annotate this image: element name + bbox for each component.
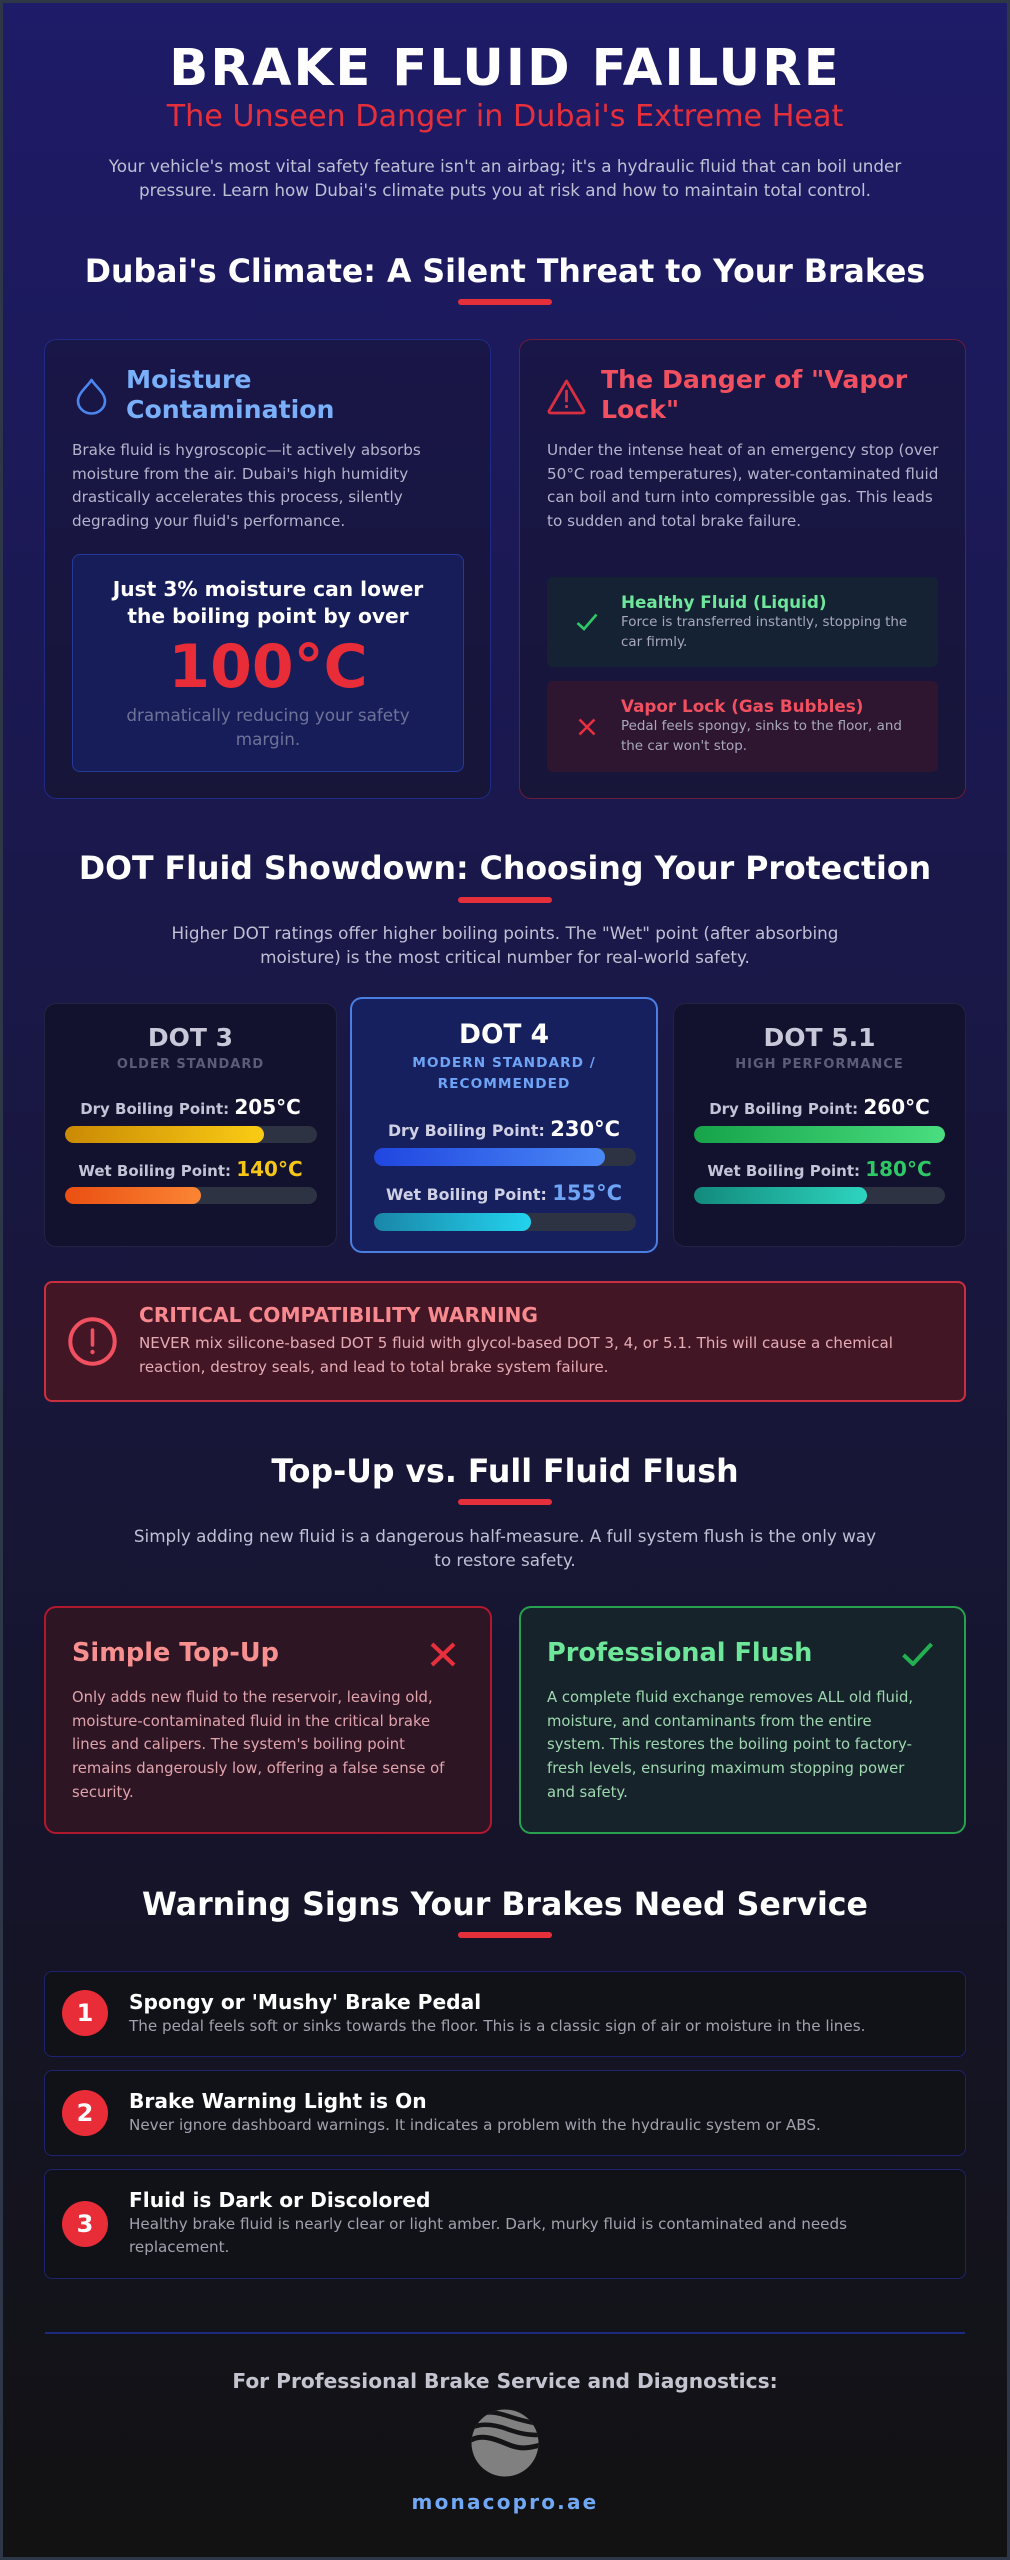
sign title: Spongy or 'Mushy' Brake Pedal [129,1990,481,2014]
sign description: Healthy brake fluid is nearly clear or light amber. Dark, murky fluid is contaminated and needs [129,2215,847,2233]
icon: alert circle [68,1317,117,1366]
icon: check [902,1642,933,1666]
stat lead-in: Just 3% moisture can lower [113,577,423,601]
number badge [62,2090,108,2136]
panel: simple top-up [44,1606,492,1834]
stat lead-in [112,577,424,628]
warning sign 3 [44,2169,966,2279]
vapor description: Pedal feels spongy, sinks to the floor, and [621,719,902,734]
flush intro text: Simply adding new fluid is a dangerous half-measure. A full system flush is the only way [134,1526,876,1546]
callout: compatibility warning [44,1281,966,1402]
DOT intro text: Higher DOT ratings offer higher boiling points. The "Wet" point (after absorbing [172,923,838,943]
flush intro text: to restore safety. [434,1550,576,1570]
top-up text: Only adds new fluid to the reservoir, leaving old, [72,1689,433,1706]
panel body text: degrading your fluid's performance. [72,512,345,530]
icon: cross [578,718,596,736]
top-up text: moisture-contaminated fluid in the critical brake [72,1713,430,1730]
sign description: Never ignore dashboard warnings. It indicates a problem with the hydraulic system or ABS. [129,2116,821,2134]
number badge [62,1990,108,2036]
wet bar [374,1213,636,1231]
top-up heading: Simple Top-Up [72,1638,279,1668]
intro text: pressure. Learn how Dubai's climate puts you at risk and how to maintain total control. [139,180,871,200]
sign title: Brake Warning Light is On [129,2089,427,2113]
number badge: 1 [77,1999,93,2027]
warning sign 2 [44,2070,966,2156]
stat caption: dramatically reducing your safety [126,705,410,725]
top-up text: remains dangerously low, offering a false sense of [72,1760,444,1777]
footer website: monacopro.ae [412,2490,598,2514]
dry bar [694,1126,945,1143]
DOT intro text [172,923,838,967]
panel: DOT 4 [350,997,658,1253]
dry bar [65,1126,317,1143]
panel body text: drastically accelerates this process, silently [72,488,403,506]
DOT 3 tag: OLDER STANDARD [117,1057,264,1072]
DOT 4 tag: RECOMMENDED [438,1076,570,1092]
warning heading: CRITICAL COMPATIBILITY WARNING [139,1303,538,1327]
panel body text: 50°C road temperatures), water-contaminated fluid [547,465,938,483]
warning sign 1 [44,1971,966,2057]
dry label: Dry Boiling Point: 230°C [388,1117,620,1141]
DOT 4 tag: MODERN STANDARD / [412,1055,596,1071]
icon: water drop [76,378,106,415]
panel: vapor lock [519,339,966,799]
footer call to action: For Professional Brake Service and Diagnostics: [232,2369,778,2393]
panel: DOT 5.1 [673,1003,966,1247]
flush text: moisture, and contaminants from the entire [547,1713,872,1730]
top-up text: security. [72,1784,134,1801]
panel: DOT 3 [44,1003,337,1247]
wet bar [694,1187,945,1204]
heading: flush section: Top-Up vs. Full Fluid Flush [271,1454,739,1490]
panel: moisture contamination [44,339,491,799]
DOT 5.1 tag: HIGH PERFORMANCE [735,1057,904,1072]
flush intro text [134,1526,876,1570]
icon: cross [430,1642,456,1666]
vapor title: Vapor Lock (Gas Bubbles) [621,696,863,716]
stat lead-in: the boiling point by over [127,604,409,628]
heading: warning signs: Warning Signs Your Brakes Need Service [142,1887,868,1923]
DOT 3 name: DOT 3 [148,1023,233,1052]
dry label: Dry Boiling Point: 205°C [80,1095,301,1119]
panel: professional flush [519,1606,966,1834]
DOT 4 tag [412,1055,596,1092]
stat number: 100°C [168,632,368,702]
panel body text [547,441,938,530]
DOT 4 name: DOT 4 [459,1019,549,1050]
vapor description [621,719,902,754]
flush text [547,1689,913,1801]
panel heading: Lock" [601,395,679,424]
panel heading [126,365,334,424]
sign title: Fluid is Dark or Discolored [129,2188,431,2212]
panel body text: moisture from the air. Dubai's high humidity [72,465,408,483]
healthy fluid row [547,577,938,667]
number badge: 2 [77,2099,93,2127]
healthy description [621,615,907,650]
wet bar [65,1187,317,1204]
flush text: A complete fluid exchange removes ALL old fluid, [547,1689,913,1706]
healthy description: Force is transferred instantly, stopping the [621,615,907,630]
panel heading [601,365,908,424]
panel heading: The Danger of "Vapor [601,365,907,394]
warning text [139,1334,893,1376]
flush heading: Professional Flush [547,1638,812,1668]
panel body text [72,441,421,530]
panel body text: can boil and turn into compressible gas. This leads [547,488,933,506]
wet label: Wet Boiling Point: 155°C [386,1181,622,1205]
stat caption: margin. [236,729,300,749]
heading: climate section: Dubai's Climate: A Silent Threat to Your Brakes [85,254,925,290]
warning text: reaction, destroy seals, and lead to total brake system failure. [139,1358,608,1376]
DOT 5.1 name: DOT 5.1 [763,1023,876,1052]
sign description: replacement. [129,2238,229,2256]
sign description: The pedal feels soft or sinks towards the floor. This is a classic sign of air or moisture in the lines. [129,2017,865,2035]
number badge [62,2201,108,2247]
panel body text: Brake fluid is hygroscopic—it actively absorbs [72,441,421,459]
wet label: Wet Boiling Point: 180°C [707,1157,932,1181]
top-up text: lines and calipers. The system's boiling point [72,1736,405,1753]
stat caption [126,705,410,749]
wet label: Wet Boiling Point: 140°C [78,1157,303,1181]
vapor description: the car won't stop. [621,739,747,754]
icon: logo [472,2410,538,2476]
flush text: and safety. [547,1784,628,1801]
top-up text [72,1689,445,1801]
healthy description: car firmly. [621,635,687,650]
intro text [108,156,902,200]
panel body text: to sudden and total brake failure. [547,512,801,530]
flush text: system. This restores the boiling point to factory- [547,1736,912,1753]
healthy title: Healthy Fluid (Liquid) [621,592,827,612]
panel heading: Contamination [126,395,334,424]
DOT intro text: moisture) is the most critical number for real-world safety. [260,947,750,967]
intro text: Your vehicle's most vital safety feature isn't an airbag; it's a hydraulic fluid that can boil under [109,156,901,176]
number badge: 3 [77,2210,93,2238]
icon: check [576,614,598,631]
subtitle: The Unseen Danger in Dubai's Extreme Heat [167,99,843,134]
panel body text: Under the intense heat of an emergency stop (over [547,441,938,459]
heading: DOT section: DOT Fluid Showdown: Choosing Your Protection [79,851,931,887]
vapor lock row [547,681,938,772]
stat callout [72,554,464,772]
panel heading: Moisture [126,365,251,394]
icon: warning triangle [548,380,586,414]
sign description [129,2215,847,2256]
warning text: NEVER mix silicone-based DOT 5 fluid with glycol-based DOT 3, 4, or 5.1. This will cause a chemical [139,1334,893,1352]
flush text: fresh levels, ensuring maximum stopping power [547,1760,904,1777]
title: BRAKE FLUID FAILURE [169,38,841,98]
dry label: Dry Boiling Point: 260°C [709,1095,930,1119]
dry bar [374,1148,636,1166]
